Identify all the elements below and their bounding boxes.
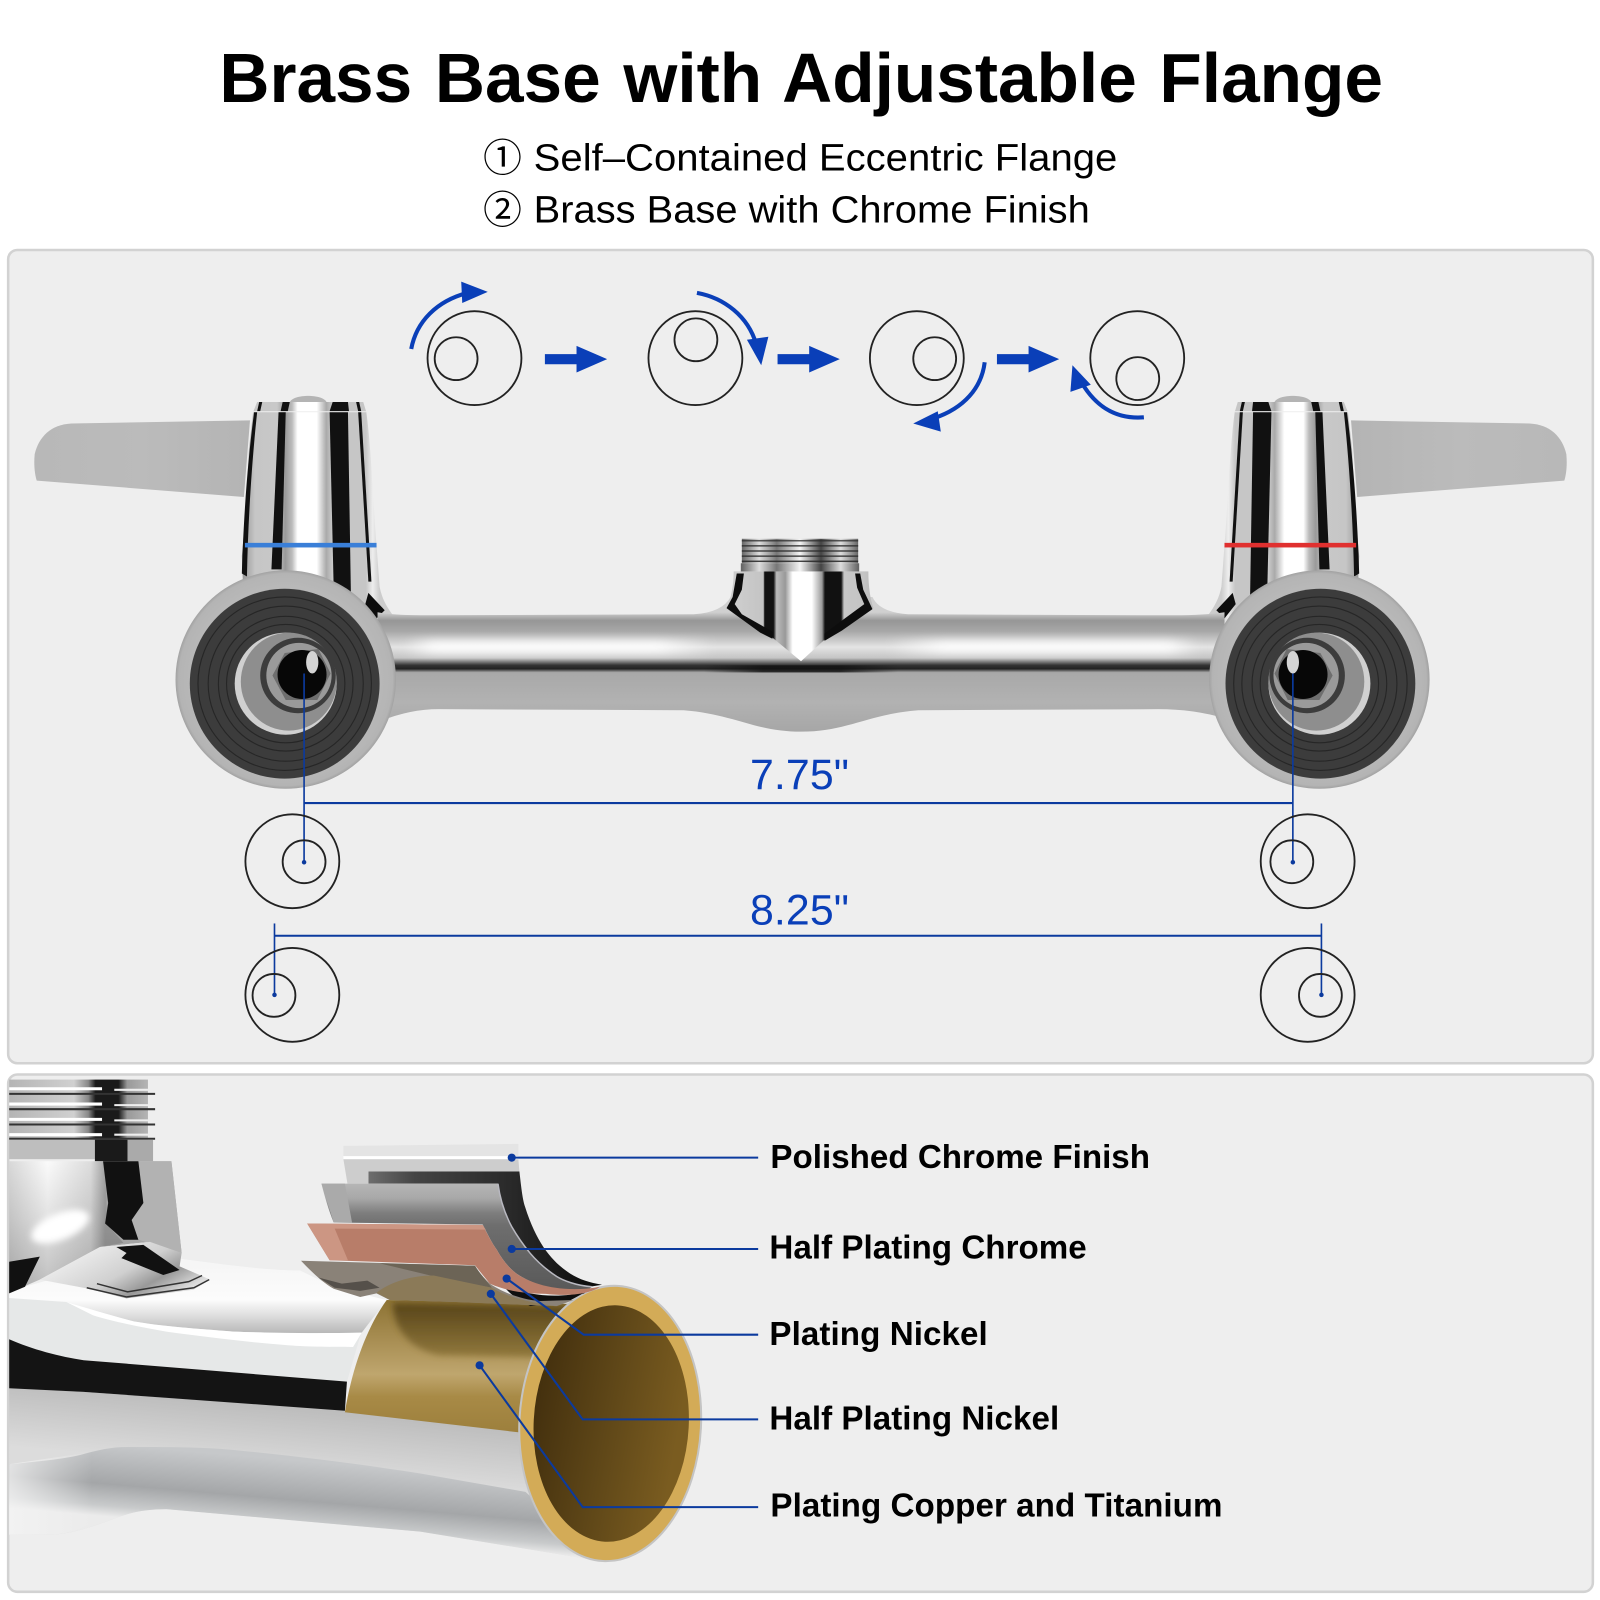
callout leader lines (477, 1155, 758, 1507)
curved arrow 3 (913, 362, 985, 432)
label: plating copper and titanium: Plating Copper and Titanium (770, 1487, 1222, 1524)
center dots (272, 993, 1324, 997)
threaded outlet (9, 1080, 155, 1161)
dimension label 8.25: 8.25" (750, 886, 849, 934)
label: half plating chrome: Half Plating Chrome (769, 1230, 1087, 1267)
brass sleeve (345, 1300, 577, 1434)
peeled plating layers (301, 1144, 602, 1306)
main chrome pipe lower (9, 1388, 602, 1561)
leader: half plating chrome (509, 1246, 758, 1252)
flange rotation sequence (411, 282, 1184, 432)
main chrome pipe upper base (9, 1258, 387, 1382)
chrome pipe lower reflection (9, 1447, 602, 1561)
flange left 8.25 (245, 948, 339, 1042)
flange right 8.25 (1261, 948, 1355, 1042)
label: half plating nickel: Half Plating Nickel (769, 1401, 1059, 1438)
curved arrow 4 (1070, 365, 1144, 418)
flare collar (40, 1242, 210, 1298)
left handle (34, 396, 394, 643)
leader: plating nickel (504, 1276, 758, 1335)
horizontal pipe (378, 597, 1224, 732)
flange step 1 (428, 311, 521, 405)
dimension line (274, 923, 1321, 995)
layer: half plating chrome backing (368, 1171, 602, 1288)
cold indicator band (245, 543, 377, 547)
faucet body (34, 396, 1567, 789)
title: Brass Base with Adjustable Flange (219, 39, 1383, 117)
center dots (302, 860, 1295, 864)
dark gap under copper (500, 1282, 586, 1306)
arrow right 1 (545, 346, 607, 372)
layer: copper (307, 1223, 600, 1295)
outlet neck (9, 1161, 182, 1293)
dimension: 8.25 inches (245, 886, 1355, 1042)
black wedge (9, 1257, 40, 1293)
layer labels (769, 1139, 1222, 1524)
flange step 3 (870, 311, 964, 405)
layer: half plating grey (321, 1184, 592, 1294)
subtitle list (483, 136, 1117, 232)
panel: adjustable flange (8, 250, 1593, 1063)
subtitle item 2: ② (483, 189, 522, 232)
arrow right 2 (778, 346, 840, 372)
curved arrow 2 (697, 293, 768, 365)
subtitle item 1: ① (483, 137, 522, 180)
layer: polished chrome (343, 1144, 519, 1184)
flange right 7.75 (1261, 814, 1355, 908)
label: plating nickel: Plating Nickel (769, 1316, 988, 1353)
flange left 7.75 (245, 814, 339, 908)
curved arrow 1 (411, 282, 488, 349)
arrow right 3 (997, 346, 1059, 372)
pipe upper shaded area (9, 1258, 387, 1333)
right flange (1209, 570, 1430, 789)
dimension line (304, 673, 1293, 862)
dimension label 7.75: 7.75" (750, 751, 849, 799)
layer: half plating nickel (301, 1261, 573, 1306)
left flange (176, 570, 396, 789)
cutaway pipe illustration (9, 1080, 708, 1566)
black reflection band (9, 1339, 347, 1411)
leader: half plating nickel (488, 1291, 758, 1419)
flange step 4 (1090, 311, 1184, 405)
subtitle item 1: Self–Contained Eccentric Flange (534, 136, 1117, 178)
brass ring end (512, 1281, 708, 1566)
pipe white highlight stripe (66, 1302, 362, 1347)
dimension: 7.75 inches (245, 673, 1355, 908)
panel: plating layers (8, 1074, 1593, 1592)
subtitle item 2: Brass Base with Chrome Finish (534, 188, 1090, 230)
label: polished chrome finish: Polished Chrome Finish (770, 1139, 1150, 1176)
leader: plating copper and titanium (477, 1362, 758, 1507)
right handle (1207, 396, 1567, 643)
lower left soft highlight (9, 1452, 92, 1535)
center outlet neck (727, 539, 873, 661)
leader: polished chrome finish (509, 1155, 758, 1161)
hot indicator band (1224, 543, 1356, 547)
flange step 2 (648, 311, 742, 405)
